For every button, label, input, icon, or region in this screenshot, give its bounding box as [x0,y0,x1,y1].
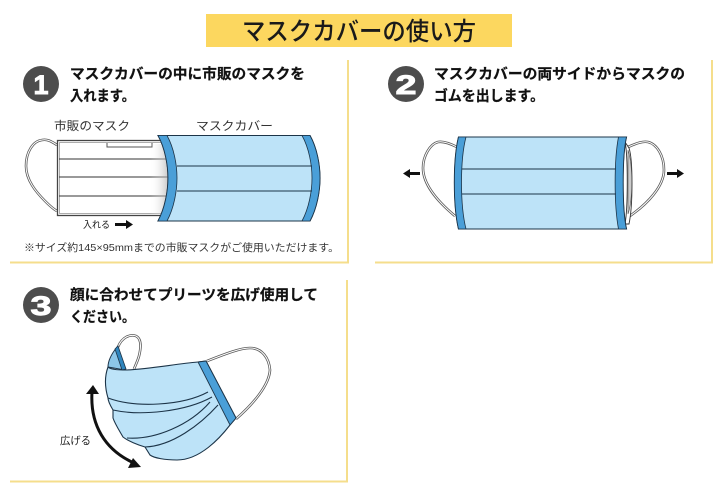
heading: step 1: 入れます。 [70,88,135,105]
illustration: pleats opened [105,335,270,460]
label: store-bought mask: 市販のマスク [54,119,130,133]
icon: step number 1 [23,66,59,102]
icon: step number 1: 1 [33,70,49,100]
panel: step 3 [10,280,347,482]
title: マスクカバーの使い方 [242,18,476,46]
title [206,14,512,47]
arrow: pull right [667,169,684,178]
panel: step 1 [10,60,348,262]
heading: step 2: マスクカバーの両サイドからマスクの [434,66,685,83]
label: spread: 広げる [60,435,91,447]
icon: step number 2: 2 [396,70,416,100]
heading: step 2 [434,66,685,105]
note: size limit: ※サイズ約145×95mmまでの市販マスクがご使用いただけます。 [24,241,339,254]
illustration: mask sliding into cover [26,136,320,221]
arrow: pull left [403,169,420,178]
heading: step 2: ゴムを出します。 [434,87,544,105]
icon: step number 3: 3 [30,291,52,321]
label: mask cover: マスクカバー [196,119,273,133]
illustration: mask with ear loops out [423,137,664,229]
panel: step 2 [375,60,712,262]
icon: step number 3 [23,287,59,323]
heading: step 3: 顔に合わせてプリーツを広げ使用して [70,286,318,304]
heading: step 3 [70,286,318,326]
icon: step number 2 [388,66,424,102]
arrow: insert [115,220,133,229]
heading: step 1: マスクカバーの中に市販のマスクを [70,65,305,83]
heading: step 1 [70,65,305,105]
label: insert: 入れる [83,220,110,231]
heading: step 3: ください。 [70,309,135,326]
arrow: spread pleats [86,385,141,468]
